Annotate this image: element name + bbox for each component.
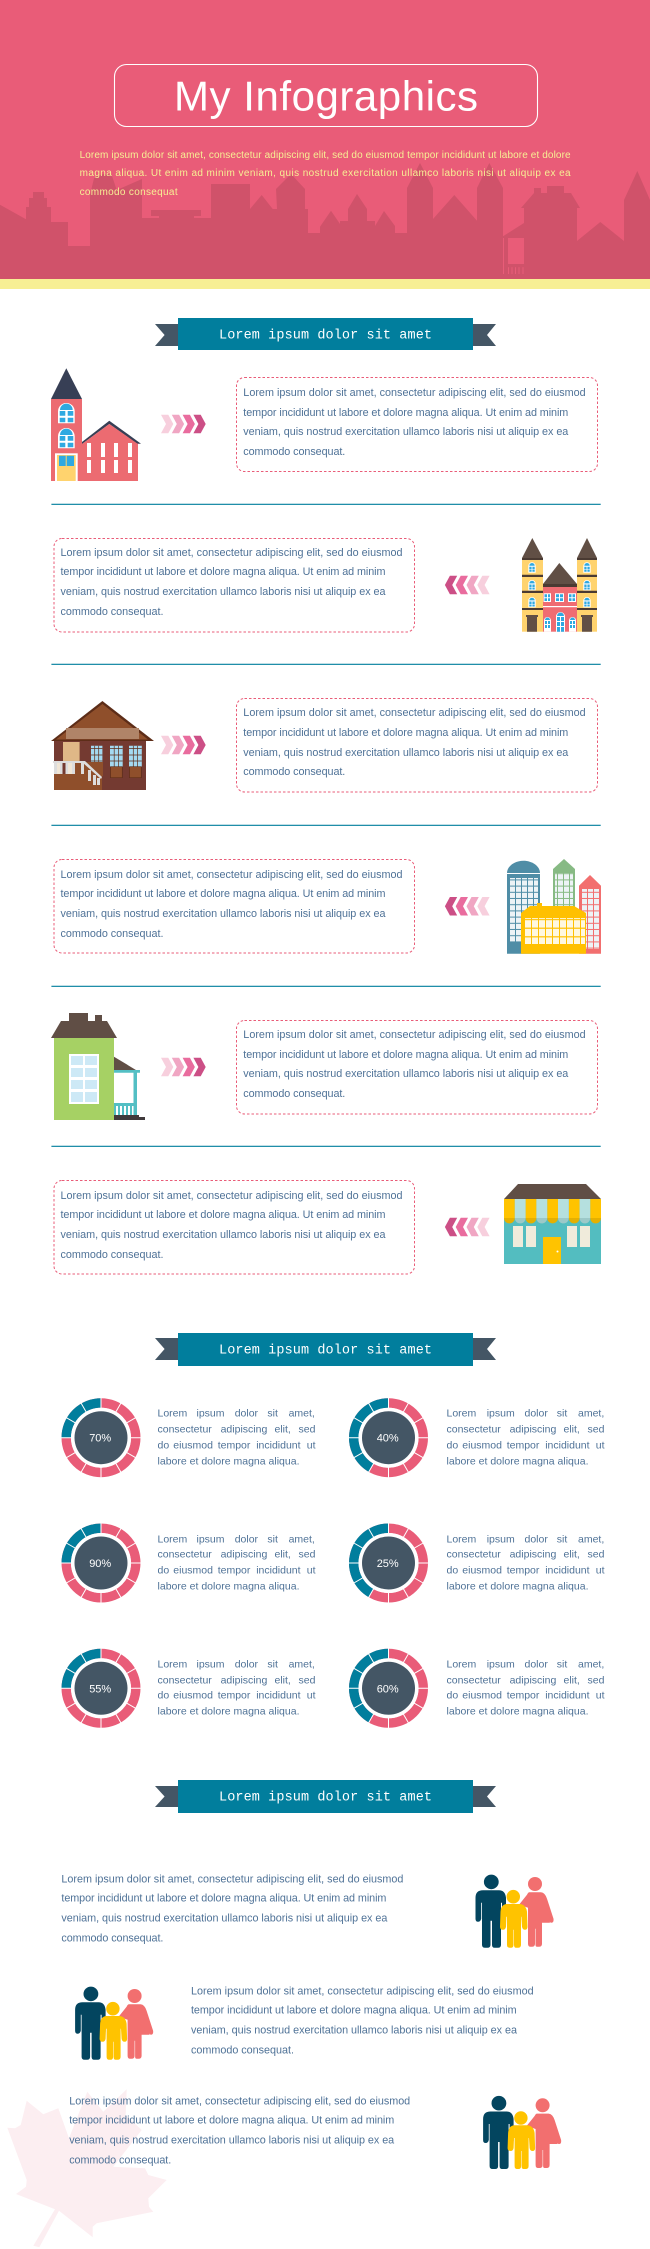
text block: sit bbox=[267, 1659, 278, 1671]
panel: row 4 city blocks bbox=[54, 859, 601, 954]
text block: sit bbox=[267, 1534, 278, 1546]
text block bbox=[158, 1408, 316, 1468]
text card bbox=[236, 378, 598, 472]
text block: ipsum bbox=[487, 1408, 515, 1420]
intro text bbox=[80, 150, 571, 198]
text card: veniam, quis nostrud exercitation ullamco laboris nisi ut aliquip ex ea bbox=[243, 1068, 568, 1080]
text block bbox=[446, 1659, 605, 1718]
panel: stat 55% bbox=[61, 1648, 316, 1728]
donut chart bbox=[61, 1523, 141, 1603]
donut chart: 70% bbox=[89, 1433, 111, 1445]
text block bbox=[158, 1659, 316, 1718]
text card bbox=[236, 1020, 598, 1114]
text block: consectetur bbox=[158, 1424, 212, 1436]
text block: do bbox=[446, 1690, 458, 1702]
text block: labore et dolore magna aliqua. bbox=[446, 1706, 588, 1718]
text card: veniam, quis nostrud exercitation ullamco laboris nisi ut aliquip ex ea bbox=[243, 426, 568, 438]
text block: adipiscing bbox=[221, 1675, 267, 1687]
text block: do bbox=[446, 1440, 458, 1452]
text block: consectetur bbox=[446, 1675, 501, 1687]
text block: ut bbox=[307, 1440, 316, 1452]
text card: commodo consequat. bbox=[60, 928, 164, 940]
text block: tempor bbox=[218, 1440, 251, 1452]
title box bbox=[114, 64, 538, 126]
text card: Lorem ipsum dolor sit amet, consectetur adipiscing elit, sed do eiusmod bbox=[243, 707, 586, 719]
text block bbox=[446, 1408, 605, 1468]
text block: amet, bbox=[578, 1659, 604, 1671]
text block: commodo consequat. bbox=[61, 1933, 163, 1945]
panel: header bbox=[0, 0, 650, 289]
text block: adipiscing bbox=[510, 1424, 556, 1436]
text block: incididunt bbox=[545, 1440, 590, 1452]
text card: commodo consequat. bbox=[60, 1249, 164, 1261]
text card: tempor incididunt ut labore et dolore magna aliqua. Ut enim ad minim bbox=[243, 1049, 568, 1061]
panel: row 6 shop bbox=[54, 1180, 601, 1274]
text block: eiusmod bbox=[462, 1690, 502, 1702]
text card: commodo consequat. bbox=[243, 766, 345, 778]
text block: eiusmod bbox=[173, 1690, 213, 1702]
text block bbox=[158, 1534, 316, 1593]
text card: tempor incididunt ut labore et dolore magna aliqua. Ut enim ad minim bbox=[60, 1209, 386, 1221]
text block bbox=[191, 1986, 534, 2057]
text block: eiusmod bbox=[173, 1565, 213, 1577]
text block: Lorem bbox=[158, 1659, 188, 1671]
donut chart bbox=[348, 1523, 428, 1603]
text block: ipsum bbox=[196, 1408, 225, 1420]
text block: ut bbox=[596, 1565, 605, 1577]
panel: stat 90% bbox=[61, 1523, 316, 1603]
donut chart bbox=[61, 1398, 141, 1478]
text block: Lorem ipsum dolor sit amet, consectetur adipiscing elit, sed do eiusmod bbox=[61, 1874, 403, 1886]
text block: incididunt bbox=[545, 1690, 590, 1702]
text block: labore et dolore magna aliqua. bbox=[446, 1456, 588, 1468]
panel: stat 25% bbox=[348, 1523, 605, 1603]
text card: veniam, quis nostrud exercitation ullamco laboris nisi ut aliquip ex ea bbox=[60, 908, 386, 920]
intro text: magna aliqua. Ut enim ad minim veniam, quis nostrud exercitation ullamco laboris nisi ut aliquip ex ea bbox=[80, 168, 571, 179]
text block: tempor incididunt ut labore et dolore magna aliqua. Ut enim ad minim bbox=[69, 2115, 394, 2127]
text block: sit bbox=[557, 1659, 567, 1671]
text block: elit, bbox=[274, 1424, 291, 1436]
intro text: commodo consequat bbox=[80, 187, 178, 198]
text block: labore et dolore magna aliqua. bbox=[446, 1581, 588, 1593]
text block: elit, bbox=[564, 1549, 580, 1561]
heading ribbon 2: Lorem ipsum dolor sit amet bbox=[219, 1344, 432, 1358]
text block: sed bbox=[298, 1424, 316, 1436]
text block: consectetur bbox=[446, 1424, 501, 1436]
text card: veniam, quis nostrud exercitation ullamco laboris nisi ut aliquip ex ea bbox=[60, 586, 386, 598]
text card: veniam, quis nostrud exercitation ullamco laboris nisi ut aliquip ex ea bbox=[60, 1229, 386, 1241]
donut chart bbox=[348, 1648, 428, 1728]
heading ribbon 3: Lorem ipsum dolor sit amet bbox=[219, 1790, 432, 1806]
text block: Lorem bbox=[446, 1534, 477, 1546]
text block: sed bbox=[298, 1549, 316, 1561]
text block: commodo consequat. bbox=[69, 2155, 171, 2167]
text block: labore et dolore magna aliqua. bbox=[158, 1706, 300, 1718]
text block: do bbox=[158, 1440, 169, 1452]
text block: veniam, quis nostrud exercitation ullamco laboris nisi ut aliquip ex ea bbox=[191, 2025, 517, 2037]
text block: Lorem bbox=[446, 1408, 477, 1420]
text block: adipiscing bbox=[221, 1549, 267, 1561]
icon: shop bbox=[504, 1184, 601, 1264]
text block: consectetur bbox=[158, 1675, 212, 1687]
text block: ut bbox=[307, 1690, 316, 1702]
text block: Lorem bbox=[158, 1534, 188, 1546]
text block: sed bbox=[298, 1675, 316, 1687]
icon: city blocks bbox=[507, 859, 601, 954]
text block: do bbox=[158, 1690, 169, 1702]
text block: elit, bbox=[564, 1424, 580, 1436]
intro text: Lorem ipsum dolor sit amet, consectetur adipiscing elit, sed do eiusmod tempor incididunt ut labore et dolore bbox=[80, 150, 571, 161]
text block: commodo consequat. bbox=[191, 2045, 294, 2057]
text card: tempor incididunt ut labore et dolore magna aliqua. Ut enim ad minim bbox=[243, 407, 568, 419]
text block bbox=[69, 2096, 410, 2167]
text block: dolor bbox=[524, 1659, 548, 1671]
text block: veniam, quis nostrud exercitation ullamco laboris nisi ut aliquip ex ea bbox=[69, 2135, 394, 2147]
text block: amet, bbox=[289, 1534, 315, 1546]
text card: Lorem ipsum dolor sit amet, consectetur adipiscing elit, sed do eiusmod bbox=[60, 1190, 402, 1202]
text card: commodo consequat. bbox=[60, 606, 164, 618]
panel: stat 60% bbox=[348, 1648, 605, 1728]
text card bbox=[236, 698, 598, 792]
icon: family bbox=[75, 1987, 153, 2060]
heading ribbon 2 bbox=[155, 1333, 496, 1366]
text block: do bbox=[446, 1565, 458, 1577]
icon: family bbox=[476, 1875, 554, 1948]
panel: people 1 bbox=[61, 1874, 554, 1948]
donut chart: 90% bbox=[89, 1558, 111, 1570]
icon: cathedral bbox=[522, 538, 597, 632]
text block: incididunt bbox=[545, 1565, 590, 1577]
skyline silhouette bbox=[0, 163, 650, 279]
arrow: chevrons left bbox=[445, 576, 490, 594]
icon: family bbox=[483, 2096, 561, 2169]
text block: labore et dolore magna aliqua. bbox=[158, 1456, 300, 1468]
text block: ut bbox=[307, 1565, 316, 1577]
panel: row 3 brown house bbox=[51, 698, 598, 792]
heading ribbon 1: Lorem ipsum dolor sit amet bbox=[219, 328, 432, 344]
heading ribbon 1 bbox=[155, 318, 496, 350]
text block: incididunt bbox=[256, 1690, 301, 1702]
donut chart: 40% bbox=[377, 1433, 399, 1445]
arrow: chevrons right bbox=[161, 1058, 206, 1076]
text block: labore et dolore magna aliqua. bbox=[158, 1581, 300, 1593]
text block: amet, bbox=[289, 1408, 315, 1420]
text card: commodo consequat. bbox=[243, 1088, 345, 1100]
text block: dolor bbox=[524, 1534, 548, 1546]
arrow: chevrons right bbox=[161, 415, 206, 433]
text card: Lorem ipsum dolor sit amet, consectetur adipiscing elit, sed do eiusmod bbox=[60, 869, 402, 881]
text card bbox=[54, 538, 414, 632]
text block: amet, bbox=[578, 1408, 604, 1420]
text block: adipiscing bbox=[510, 1675, 556, 1687]
text card: Lorem ipsum dolor sit amet, consectetur adipiscing elit, sed do eiusmod bbox=[60, 547, 402, 559]
arrow: chevrons left bbox=[445, 897, 490, 916]
text block: Lorem ipsum dolor sit amet, consectetur adipiscing elit, sed do eiusmod bbox=[69, 2096, 410, 2108]
donut chart bbox=[61, 1648, 141, 1728]
text block: tempor bbox=[507, 1565, 540, 1577]
donut chart: 25% bbox=[377, 1558, 399, 1570]
text block: eiusmod bbox=[462, 1565, 502, 1577]
text block: tempor bbox=[218, 1565, 251, 1577]
text block: consectetur bbox=[446, 1549, 501, 1561]
text block bbox=[446, 1534, 605, 1593]
text block: sit bbox=[557, 1408, 567, 1420]
panel: people 2 bbox=[75, 1986, 534, 2060]
text card: tempor incididunt ut labore et dolore magna aliqua. Ut enim ad minim bbox=[243, 727, 568, 739]
text card bbox=[54, 860, 414, 953]
text block: ipsum bbox=[196, 1534, 225, 1546]
text block: dolor bbox=[235, 1534, 259, 1546]
text block: do bbox=[158, 1565, 169, 1577]
panel: row 2 cathedral bbox=[54, 538, 597, 632]
title box: My Infographics bbox=[174, 73, 478, 120]
text block: eiusmod bbox=[173, 1440, 213, 1452]
text block: ut bbox=[596, 1690, 605, 1702]
text block: incididunt bbox=[256, 1440, 301, 1452]
text block: elit, bbox=[274, 1549, 291, 1561]
text card: veniam, quis nostrud exercitation ullamco laboris nisi ut aliquip ex ea bbox=[243, 747, 568, 759]
text block: eiusmod bbox=[462, 1440, 502, 1452]
text block: sed bbox=[588, 1549, 605, 1561]
text card: commodo consequat. bbox=[243, 446, 345, 458]
icon: brown house bbox=[51, 701, 154, 790]
text block: sed bbox=[588, 1424, 605, 1436]
text block: adipiscing bbox=[221, 1424, 267, 1436]
text block: tempor bbox=[507, 1690, 540, 1702]
text block: ipsum bbox=[487, 1659, 515, 1671]
text card: tempor incididunt ut labore et dolore magna aliqua. Ut enim ad minim bbox=[60, 888, 386, 900]
text block: dolor bbox=[524, 1408, 548, 1420]
arrow: chevrons left bbox=[445, 1218, 490, 1236]
text block: adipiscing bbox=[510, 1549, 556, 1561]
text block: tempor incididunt ut labore et dolore magna aliqua. Ut enim ad minim bbox=[191, 2005, 517, 2017]
text block: tempor bbox=[218, 1690, 251, 1702]
text block: ipsum bbox=[487, 1534, 515, 1546]
text block: tempor bbox=[507, 1440, 540, 1452]
text block: dolor bbox=[235, 1408, 259, 1420]
text block: consectetur bbox=[158, 1549, 212, 1561]
text block: elit, bbox=[274, 1675, 291, 1687]
text block: tempor incididunt ut labore et dolore magna aliqua. Ut enim ad minim bbox=[61, 1893, 386, 1905]
text card: Lorem ipsum dolor sit amet, consectetur adipiscing elit, sed do eiusmod bbox=[243, 1029, 586, 1041]
donut chart bbox=[348, 1398, 428, 1478]
icon: church bbox=[51, 368, 141, 481]
text block: veniam, quis nostrud exercitation ullamco laboris nisi ut aliquip ex ea bbox=[61, 1913, 387, 1925]
text block: elit, bbox=[564, 1675, 580, 1687]
panel: people 3 bbox=[69, 2096, 561, 2169]
text block: sit bbox=[267, 1408, 278, 1420]
text block: ipsum bbox=[196, 1659, 225, 1671]
text card: tempor incididunt ut labore et dolore magna aliqua. Ut enim ad minim bbox=[60, 566, 386, 578]
donut chart: 55% bbox=[89, 1683, 111, 1695]
text card bbox=[54, 1180, 414, 1274]
text block bbox=[61, 1874, 403, 1945]
panel: row 5 green house bbox=[51, 1013, 598, 1120]
heading ribbon 3 bbox=[155, 1780, 496, 1813]
text block: sed bbox=[588, 1675, 605, 1687]
text block: Lorem bbox=[446, 1659, 477, 1671]
icon: green house bbox=[51, 1013, 145, 1120]
text block: sit bbox=[557, 1534, 567, 1546]
text block: dolor bbox=[235, 1659, 259, 1671]
text block: ut bbox=[596, 1440, 605, 1452]
text block: amet, bbox=[578, 1534, 604, 1546]
panel: stat 70% bbox=[61, 1398, 316, 1478]
text block: incididunt bbox=[256, 1565, 301, 1577]
panel: stat 40% bbox=[348, 1398, 605, 1478]
background: maple leaf bbox=[7, 2089, 167, 2247]
text block: amet, bbox=[289, 1659, 315, 1671]
text block: Lorem bbox=[158, 1408, 188, 1420]
text block: Lorem ipsum dolor sit amet, consectetur adipiscing elit, sed do eiusmod bbox=[191, 1986, 534, 1998]
yellow band bbox=[0, 279, 650, 289]
arrow: chevrons right bbox=[161, 736, 206, 754]
panel: row 1 church bbox=[51, 368, 598, 481]
text card: Lorem ipsum dolor sit amet, consectetur adipiscing elit, sed do eiusmod bbox=[243, 387, 586, 399]
donut chart: 60% bbox=[377, 1683, 399, 1695]
